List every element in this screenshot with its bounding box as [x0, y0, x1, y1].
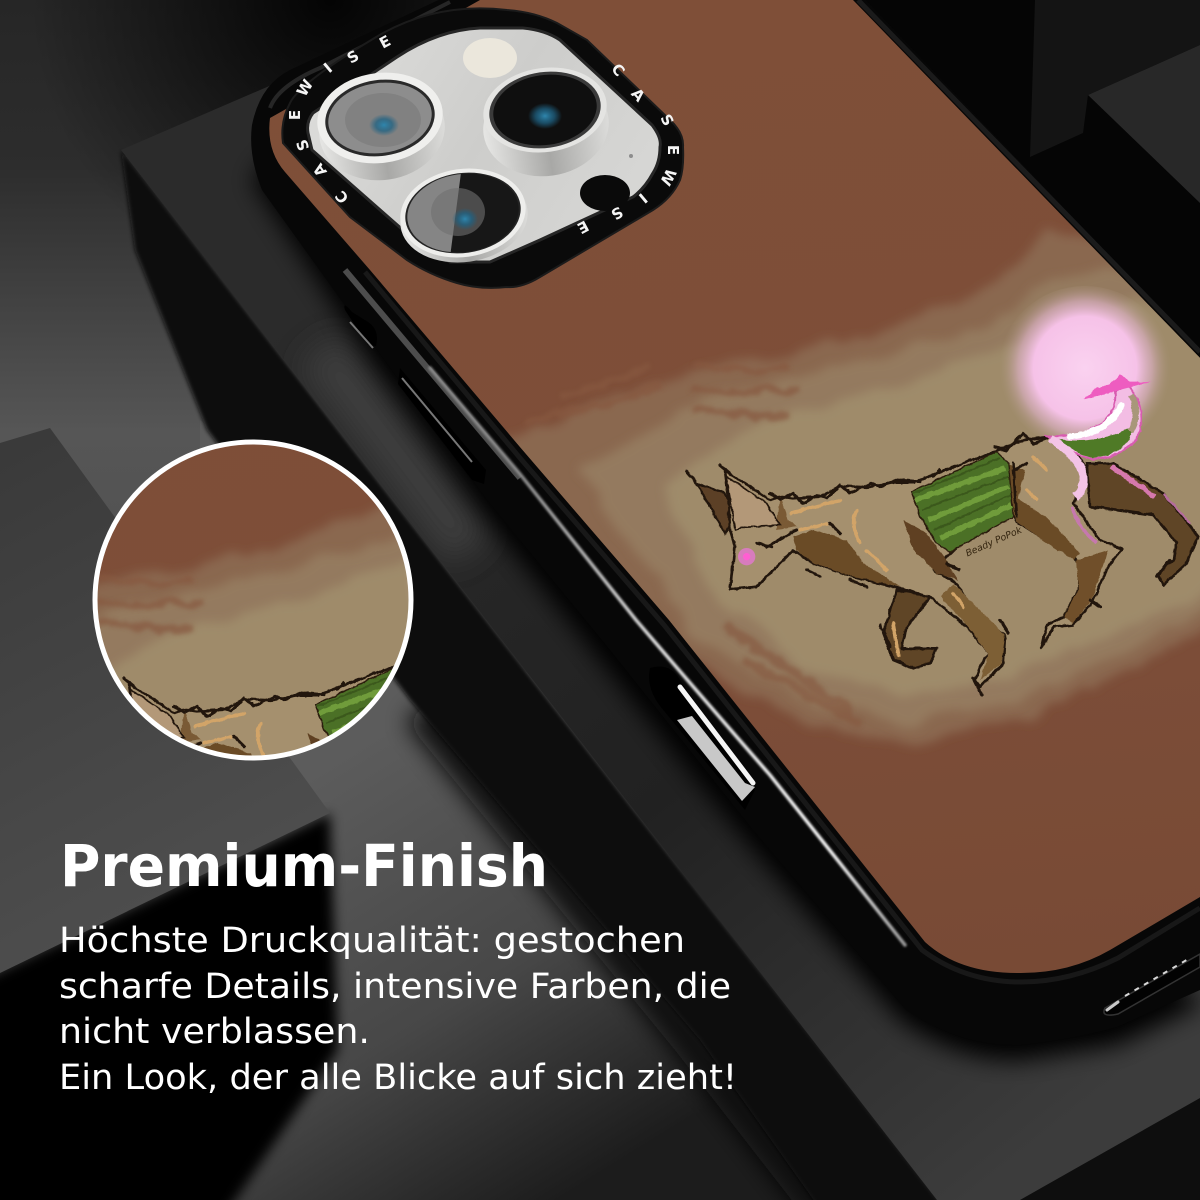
volume switch [344, 305, 377, 348]
brand lettering CASEWISE right: A [627, 85, 649, 106]
brand lettering CASEWISE left [286, 32, 394, 207]
body text: nicht verblassen. [59, 1012, 370, 1052]
brand lettering CASEWISE right [574, 60, 682, 237]
body text: Höchste Druckqualität: gestochen [59, 921, 685, 961]
case edge highlight [430, 368, 905, 945]
brand lettering CASEWISE right: S [608, 203, 626, 223]
bottom lens [400, 168, 528, 262]
top right panel [1030, 0, 1200, 157]
body text: Ein Look, der alle Blicke auf sich zieht! [59, 1058, 737, 1098]
lidar [580, 175, 630, 211]
case top rim [270, 2, 450, 108]
top-right lens [477, 60, 615, 184]
brand lettering CASEWISE left: E [286, 110, 304, 120]
brand lettering CASEWISE right: E [664, 145, 682, 155]
brand lettering CASEWISE right: I [635, 189, 651, 207]
brand lettering CASEWISE left: S [344, 47, 362, 67]
brand lettering CASEWISE left: W [293, 76, 317, 100]
brand lettering CASEWISE left: E [376, 32, 394, 52]
case body [251, 0, 1200, 1045]
brand lettering CASEWISE right: S [657, 111, 677, 129]
large block side wall soft lower edge [420, 710, 830, 1200]
top right block top face [1088, 45, 1200, 203]
black CASEWISE ring [282, 8, 683, 288]
case upper gray edge [345, 270, 520, 478]
camera island [282, 8, 683, 288]
brand lettering CASEWISE left: A [309, 160, 331, 180]
small block top face [0, 428, 330, 973]
top-left lens [311, 65, 451, 188]
phone with case [251, 0, 1200, 1016]
body text: scharfe Details, intensive Farben, die [59, 967, 731, 1007]
charging port [1104, 954, 1200, 1015]
side button slot [649, 666, 755, 810]
dark corner bottom right [1020, 1098, 1200, 1200]
phone drop shadow [252, 120, 1200, 1060]
heading: Premium-Finish [60, 832, 548, 900]
case right edge band [858, 0, 1200, 352]
lit floor behind blocks [200, 420, 940, 1200]
side button metal [677, 687, 755, 801]
detail magnifier circle [92, 440, 414, 760]
soft light on block top [320, 350, 470, 550]
cast shadow wedge under small block [0, 813, 338, 1200]
brand lettering CASEWISE right: W [656, 165, 680, 189]
flash [463, 38, 517, 78]
brand lettering CASEWISE left: C [332, 187, 352, 207]
top right dark void [840, 0, 1200, 380]
large block side wall [121, 150, 950, 1200]
volume button [398, 368, 486, 484]
microphone [629, 154, 633, 158]
body text [59, 921, 737, 1098]
brand lettering CASEWISE left: I [320, 59, 336, 77]
brand lettering CASEWISE right: C [608, 60, 628, 80]
camera glass [308, 28, 660, 262]
brand lettering CASEWISE right: E [574, 217, 592, 237]
artwork back panel: fox on brown background [269, 0, 1200, 973]
brand lettering CASEWISE left: S [293, 137, 313, 153]
